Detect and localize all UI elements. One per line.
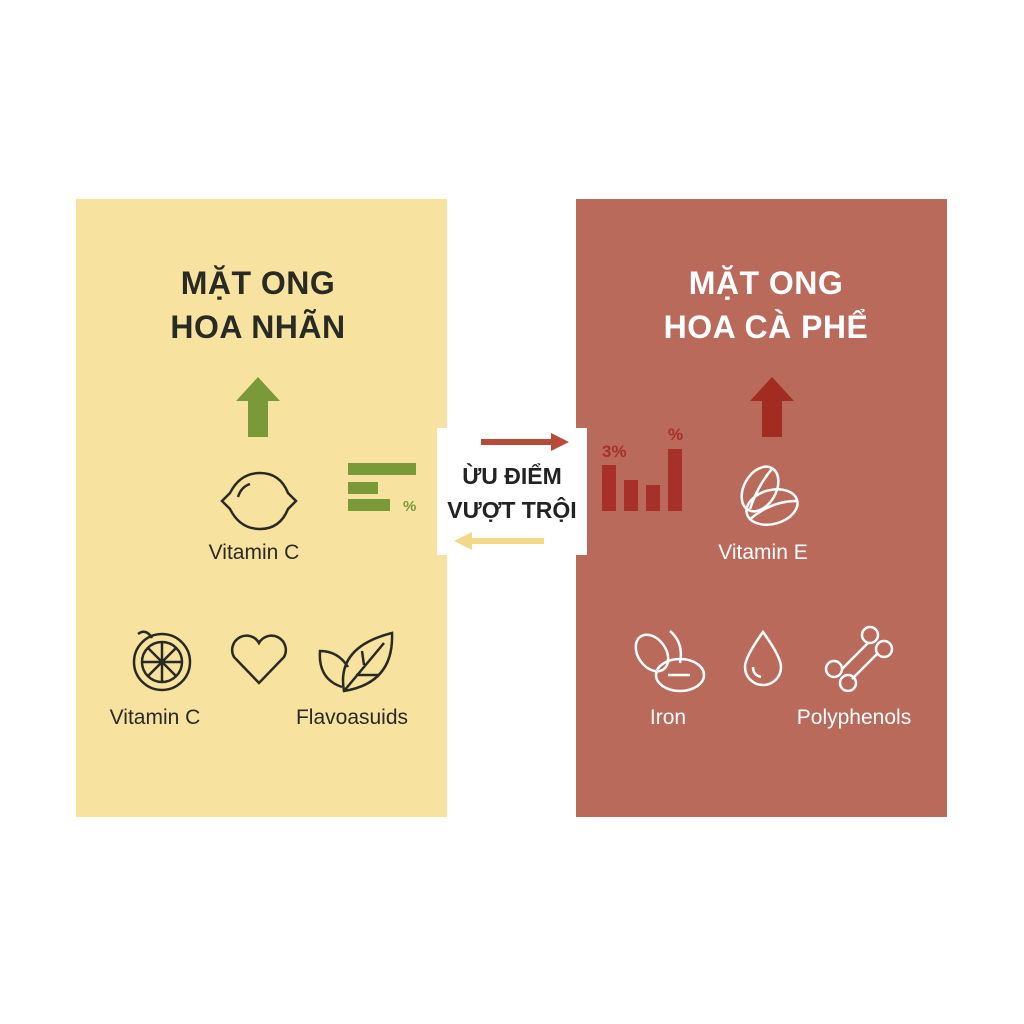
label: Polyphenols: Polyphenols <box>797 706 911 729</box>
label: Vitamin C bottom: Vitamin C <box>110 706 200 729</box>
text: advantage: ỪU ĐIỂM <box>462 463 562 489</box>
label: Vitamin C: Vitamin C <box>209 541 299 564</box>
icon: orange slice <box>132 630 192 692</box>
icon: bone <box>824 626 894 692</box>
bar chart: red: 3% <box>602 442 627 461</box>
label: Flavoasuids: Flavoasuids <box>296 706 408 729</box>
title: right: HOA CÀ PHỂ <box>664 309 868 345</box>
bar chart: green <box>348 463 416 515</box>
icon: drop <box>744 630 782 686</box>
icon: lemon <box>220 472 298 530</box>
text: advantage: VƯỢT TRỘI <box>447 497 577 523</box>
title: left <box>170 265 346 345</box>
panel: left honey <box>76 199 447 817</box>
bar chart: green: % <box>403 498 416 515</box>
icon: heart <box>230 634 288 685</box>
title: right <box>664 265 868 345</box>
icon: coffee beans <box>740 465 799 526</box>
label: Vitamin E: Vitamin E <box>718 541 808 564</box>
arrow: red right <box>481 433 569 451</box>
title: left: MẶT ONG <box>181 265 335 301</box>
bar chart: red: % <box>668 425 683 444</box>
bar chart: red <box>602 425 683 511</box>
arrow: yellow left <box>454 532 544 550</box>
callout: center advantage box <box>437 428 587 555</box>
text: advantage <box>447 463 577 523</box>
title: right: MẶT ONG <box>689 265 843 301</box>
label: Iron: Iron <box>650 706 686 729</box>
icon: leaf <box>318 631 394 692</box>
panel: right honey <box>576 199 947 817</box>
icon: green up arrow <box>236 377 280 437</box>
title: left: HOA NHÃN <box>170 309 346 345</box>
icon: red up arrow <box>750 377 794 437</box>
icon: beans/pill <box>634 630 706 692</box>
